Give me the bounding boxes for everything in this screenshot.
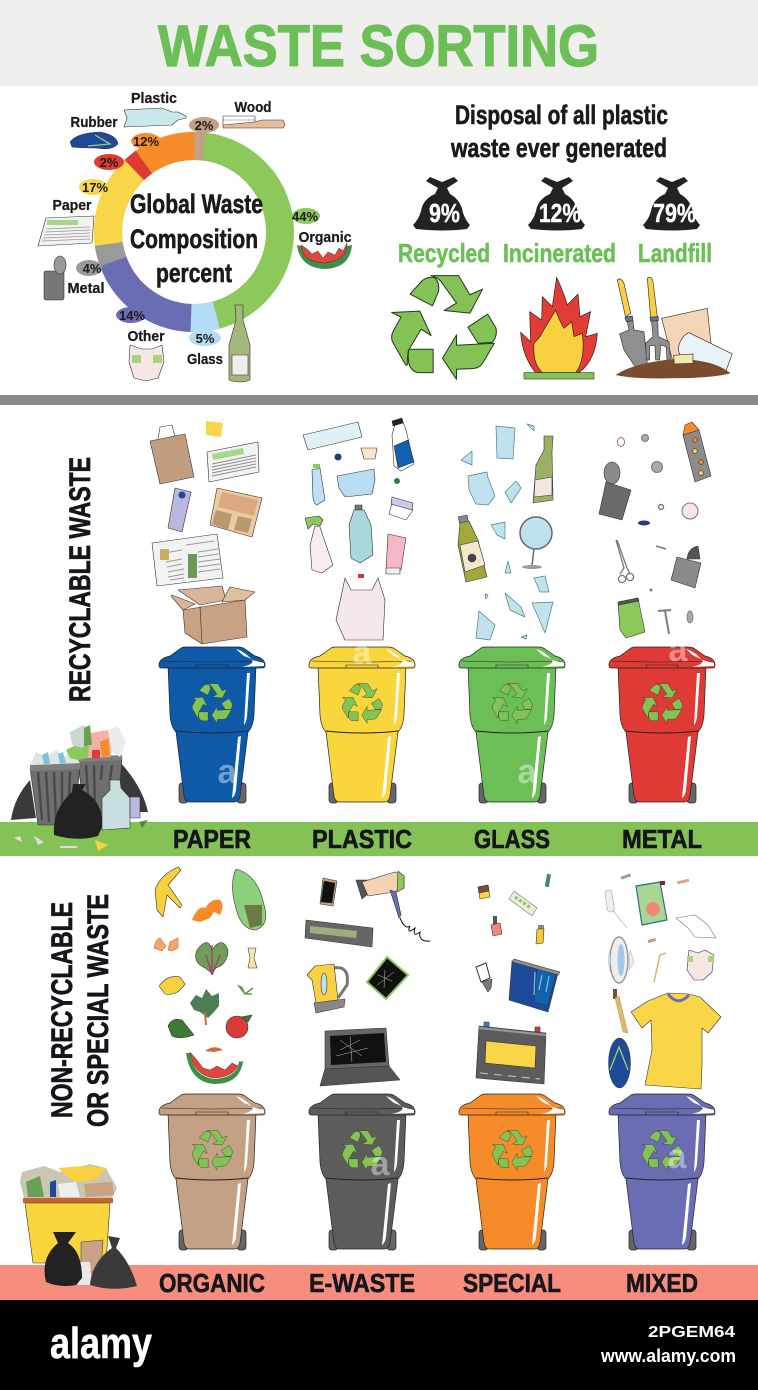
nail polish <box>491 916 502 936</box>
column: e-waste <box>305 871 430 1086</box>
label: incinerated: Incinerated <box>503 238 616 268</box>
label: organic with watermelon: Organic <box>298 229 352 246</box>
green label band <box>0 822 758 856</box>
avocado <box>168 1019 194 1038</box>
oil bottle <box>458 515 487 582</box>
label: plastic with bottle <box>124 90 186 127</box>
bin: organic <box>159 1094 265 1250</box>
column: mixed <box>605 873 721 1089</box>
bubble: rubber 2%: 2% <box>100 155 119 170</box>
tampon <box>605 890 627 928</box>
bin: glass: a <box>518 753 538 791</box>
bubble: glass 5%: 5% <box>196 331 215 346</box>
small green battery <box>545 874 551 887</box>
plastic wrap roll <box>303 422 362 450</box>
apple core <box>248 948 257 968</box>
bag: recycled 9%: 9% <box>429 198 460 228</box>
cracked tablet <box>367 957 408 999</box>
glass shards <box>461 424 553 640</box>
bag: landfill 79%: 79% <box>653 198 696 228</box>
heading: non-recyclable or special waste: OR SPECIAL WASTE <box>82 894 115 1127</box>
bin: paper: a <box>218 753 238 791</box>
label: glass with bottle <box>187 305 250 382</box>
bin: mixed <box>609 1094 715 1250</box>
icon: flame <box>521 277 597 379</box>
keyboard <box>305 920 373 947</box>
label: organic: ORGANIC <box>159 1268 265 1298</box>
label: other with diaper <box>128 328 165 381</box>
footer url: www.alamy.com <box>600 1346 736 1366</box>
label: special: SPECIAL <box>463 1268 561 1298</box>
bag: kraft paper <box>150 425 194 484</box>
icon: landfill tools and waste <box>616 277 732 378</box>
bin: special <box>459 1094 565 1250</box>
car battery <box>476 1022 546 1084</box>
bin: plastic <box>309 634 415 803</box>
label: metal: METAL <box>622 824 702 854</box>
apple <box>226 1015 252 1038</box>
tissue <box>676 915 716 938</box>
yogurt pot <box>361 448 377 459</box>
paint can <box>509 959 560 1012</box>
wine bottle <box>533 436 553 503</box>
egg shells <box>154 938 178 951</box>
panel: global waste composition donut <box>38 90 352 382</box>
title: WASTE SORTING <box>158 14 599 79</box>
bubble: metal 4%: 4% <box>83 261 102 276</box>
napa cabbage <box>232 869 266 930</box>
food pouch <box>636 881 667 925</box>
label: metal with can <box>44 256 104 300</box>
label: metal with can: Metal <box>68 280 104 297</box>
green cap <box>394 478 400 484</box>
bin: plastic: a <box>353 634 373 672</box>
watermelon rind <box>186 1052 243 1084</box>
donut centre label: Global Waste <box>130 189 263 219</box>
bin: e-waste <box>309 1094 415 1250</box>
blister pack <box>509 891 537 916</box>
label: wood with comb <box>223 99 285 128</box>
lighter <box>536 925 544 944</box>
diaper <box>687 950 714 980</box>
spray can <box>683 422 711 482</box>
column: organic <box>154 867 266 1084</box>
label: rubber with flip-flop: Rubber <box>70 114 118 131</box>
herb plant <box>190 989 219 1025</box>
jar <box>468 472 495 505</box>
label: plastic: PLASTIC <box>312 824 412 854</box>
magazine <box>152 534 223 586</box>
sticky note <box>206 421 223 437</box>
header band <box>0 0 758 86</box>
bubble: organic 44%: 44% <box>292 209 318 224</box>
bin: metal <box>609 631 715 803</box>
bag: incinerated 12%: 12% <box>539 198 581 228</box>
label: other with diaper: Other <box>128 328 165 345</box>
bubble: paper 17%: 17% <box>82 180 108 195</box>
label: e-waste: E-WASTE <box>309 1268 415 1298</box>
illustration: overfull yellow skip <box>20 1164 137 1289</box>
donut centre label <box>130 189 263 288</box>
t-shirt <box>631 993 721 1089</box>
razor <box>658 610 671 634</box>
small herb <box>238 985 253 994</box>
footer band <box>0 1300 758 1390</box>
kettle <box>307 964 347 1013</box>
donut centre label: percent <box>156 258 232 288</box>
bubble: glass 5% <box>189 330 221 346</box>
pink tube <box>386 534 406 574</box>
bubble: other 14%: 14% <box>119 308 145 323</box>
column: metal <box>599 422 711 638</box>
bin: e-waste: a <box>371 1145 391 1183</box>
bubble: metal 4% <box>76 260 102 276</box>
label: recycled: Recycled <box>398 238 490 268</box>
milk bottle <box>392 418 414 471</box>
chart: donut of waste composition <box>108 146 280 318</box>
bubble: plastic 12%: 12% <box>133 134 159 149</box>
column: glass <box>458 424 553 640</box>
phone <box>320 878 337 906</box>
small bottle <box>312 464 325 505</box>
bin: glass <box>459 647 565 803</box>
flip-flop <box>608 1038 630 1088</box>
bag: incinerated 12% <box>528 177 585 230</box>
heading: non-recyclable or special waste: NON-RECYCLABLE <box>46 902 79 1118</box>
melon scrap <box>205 1047 223 1052</box>
label: rubber with flip-flop <box>70 114 118 149</box>
plastic bag <box>336 574 385 640</box>
small waste bits <box>621 873 689 943</box>
label: glass with bottle: Glass <box>187 351 223 368</box>
heading: recyclable waste: RECYCLABLE WASTE <box>64 457 97 702</box>
label: paper: PAPER <box>173 824 251 854</box>
cfl bulb <box>476 963 492 992</box>
bubble: wood 2%: 2% <box>195 118 214 133</box>
chocolate-coloured battery cell <box>478 885 490 899</box>
washers and discs <box>618 434 698 592</box>
panel: disposal of plastic waste <box>392 100 732 379</box>
salmon label band <box>0 1265 758 1300</box>
drinking glass <box>496 426 515 459</box>
icon: recycling arrows <box>392 276 496 379</box>
label: paper with newspaper: Paper <box>52 197 92 214</box>
sanitary pad <box>608 937 634 983</box>
label: glass: GLASS <box>474 824 550 854</box>
small metal part <box>687 611 693 623</box>
disposal heading <box>450 100 668 163</box>
column: paper <box>150 421 262 644</box>
label: wood with comb: Wood <box>234 99 272 116</box>
bubble: rubber 2% <box>94 154 124 170</box>
donut centre label: Composition <box>130 224 258 254</box>
water bottle <box>349 505 373 563</box>
mirror <box>520 517 552 569</box>
hair dryer <box>356 871 430 941</box>
footer image id: 2PGEM64 <box>648 1324 735 1341</box>
bubble: wood 2% <box>189 117 219 133</box>
bin: mixed: a <box>668 1138 688 1176</box>
footer logo: alamy <box>50 1319 152 1368</box>
disposal heading: waste ever generated <box>450 133 667 163</box>
lemon <box>159 976 185 994</box>
illustration: overflowing trash cans <box>11 725 148 851</box>
label: mixed: MIXED <box>626 1268 698 1298</box>
plastic tub <box>337 469 375 497</box>
disposal heading: Disposal of all plastic <box>455 100 668 130</box>
column: plastic <box>303 418 414 640</box>
bag: landfill 79% <box>643 177 700 230</box>
orange peel <box>192 900 222 922</box>
label: landfill: Landfill <box>638 238 712 268</box>
toothbrush <box>613 989 628 1033</box>
label: organic with watermelon <box>297 229 352 269</box>
column: special <box>476 874 560 1084</box>
torn can <box>671 546 701 588</box>
egg carton <box>210 488 262 537</box>
cardboard box <box>171 586 255 644</box>
beet leaves <box>196 942 228 975</box>
divider band <box>0 395 758 405</box>
bag: recycled 9% <box>413 177 470 230</box>
bin: paper <box>159 647 265 803</box>
newspaper <box>207 442 259 482</box>
lidded cup <box>389 497 413 520</box>
heading: non-recyclable or special waste <box>46 894 115 1127</box>
nail <box>656 546 666 549</box>
soda can <box>618 598 645 638</box>
label: plastic with bottle: Plastic <box>131 90 177 107</box>
banana peel <box>155 867 182 917</box>
spray bottle <box>305 516 333 573</box>
scissors <box>616 540 634 583</box>
laptop <box>320 1028 400 1086</box>
label: paper with newspaper <box>38 197 94 246</box>
bin: metal: a <box>669 631 689 669</box>
bottle cap <box>334 454 342 460</box>
open food can <box>599 462 631 520</box>
straw <box>654 953 666 982</box>
drink carton <box>168 488 191 532</box>
